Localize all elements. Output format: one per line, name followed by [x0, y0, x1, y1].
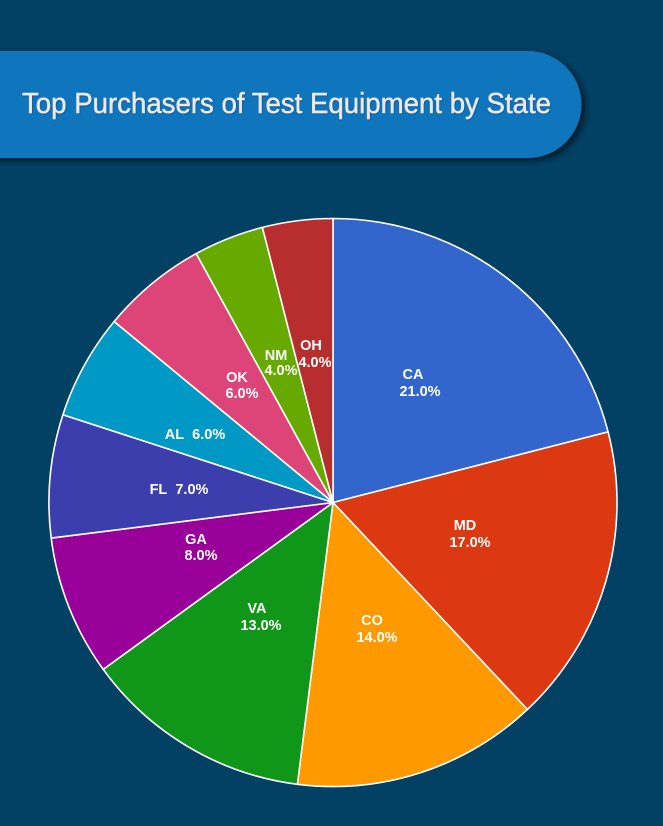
- label: CO: CO: [361, 613, 383, 629]
- label: GA: GA: [185, 532, 207, 548]
- slice: FL: [49, 415, 333, 538]
- label: MD: MD: [454, 518, 476, 534]
- slice: GA: [51, 502, 333, 669]
- label: MD: 17.0%: [449, 535, 491, 551]
- title banner: [0, 51, 586, 161]
- label: CA: 21.0%: [399, 384, 441, 400]
- slice: CA: [333, 218, 608, 502]
- label: VA: VA: [247, 601, 267, 617]
- slice: OK: [114, 254, 333, 502]
- label: VA: 13.0%: [240, 618, 282, 634]
- label: OK: 6.0%: [225, 386, 259, 402]
- slice: MD: [333, 432, 617, 710]
- title: Top Purchasers of Test Equipment by State: [22, 88, 551, 120]
- label: CA: CA: [403, 367, 423, 383]
- slice: NM: [196, 227, 333, 502]
- label: AL: AL 6.0%: [165, 427, 225, 443]
- label: FL: FL 7.0%: [150, 482, 209, 498]
- slice: VA: [103, 502, 333, 784]
- pie labels: [150, 338, 491, 646]
- label: NM: 4.0%: [264, 363, 298, 379]
- label: GA: 8.0%: [184, 548, 218, 564]
- slice: OH: [262, 218, 333, 502]
- label: NM: NM: [265, 348, 287, 364]
- slice: CO: [297, 502, 527, 787]
- pie chart: [49, 218, 617, 787]
- slice: AL: [63, 322, 333, 502]
- label: OH: OH: [300, 338, 322, 354]
- label: CO: 14.0%: [356, 630, 398, 646]
- label: OK: OK: [226, 370, 248, 386]
- label: OH: 4.0%: [298, 355, 332, 371]
